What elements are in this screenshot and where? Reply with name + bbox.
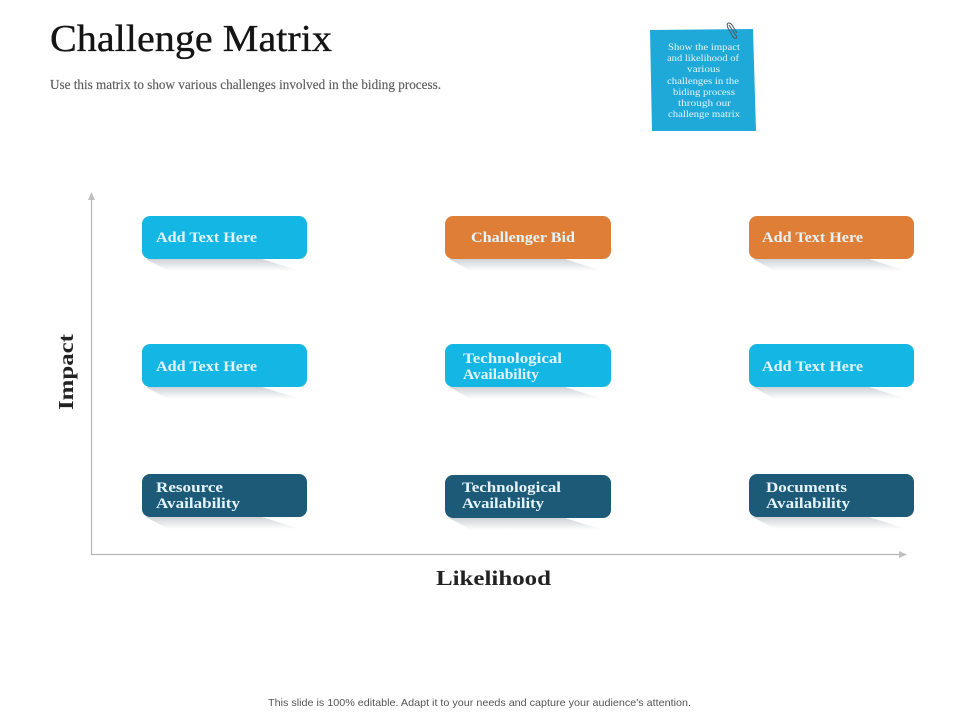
axis label: likelihood: Likelihood (436, 566, 551, 590)
cell: middle left (142, 344, 307, 399)
sticky note callout: Show the impact (668, 43, 740, 53)
sticky note callout (650, 29, 756, 131)
title: Challenge Matrix (50, 18, 332, 60)
cell: middle right: Add Text Here (762, 359, 863, 375)
cell: top left: Add Text Here (156, 230, 257, 246)
cell: bottom left: Resource (156, 480, 223, 496)
cell: bottom centre (445, 475, 611, 530)
cell: bottom left: Availability (156, 496, 241, 512)
cell: middle centre (445, 344, 611, 399)
cell: middle right (749, 344, 914, 399)
cell: bottom right (749, 474, 914, 529)
sticky note callout: through our (678, 99, 732, 109)
horizontal axis arrow (91, 551, 907, 558)
sticky note callout: biding process (673, 88, 735, 98)
cell: top right (749, 216, 914, 271)
cell: top right: Add Text Here (762, 230, 863, 246)
cell: bottom right: Availability (766, 496, 851, 512)
cell: bottom centre: Technological (462, 480, 561, 496)
axis label: impact: Impact (54, 334, 78, 410)
sticky note callout: and likelihood of (667, 53, 740, 64)
cell: middle centre: Availability (463, 367, 540, 383)
vertical axis arrow (88, 192, 95, 555)
icon: paper clip (727, 23, 737, 38)
cell: bottom right: Documents (766, 480, 847, 496)
cell: top centre (445, 216, 611, 271)
cell: top centre: Challenger Bid (471, 230, 576, 246)
sticky note callout: various (687, 65, 720, 75)
cell: top left (142, 216, 307, 271)
sticky note callout: challenges in the (667, 77, 739, 87)
sticky note callout: challenge matrix (668, 110, 740, 120)
footer note: This slide is 100% editable. Adapt it to your needs and capture your audience's attention. (268, 697, 691, 709)
cell: middle centre: Technological (463, 351, 562, 367)
cell: middle left: Add Text Here (156, 359, 257, 375)
subtitle: Use this matrix to show various challenges involved in the biding process. (50, 77, 441, 92)
cell: bottom centre: Availability (462, 496, 545, 512)
cell: bottom left (142, 474, 307, 529)
